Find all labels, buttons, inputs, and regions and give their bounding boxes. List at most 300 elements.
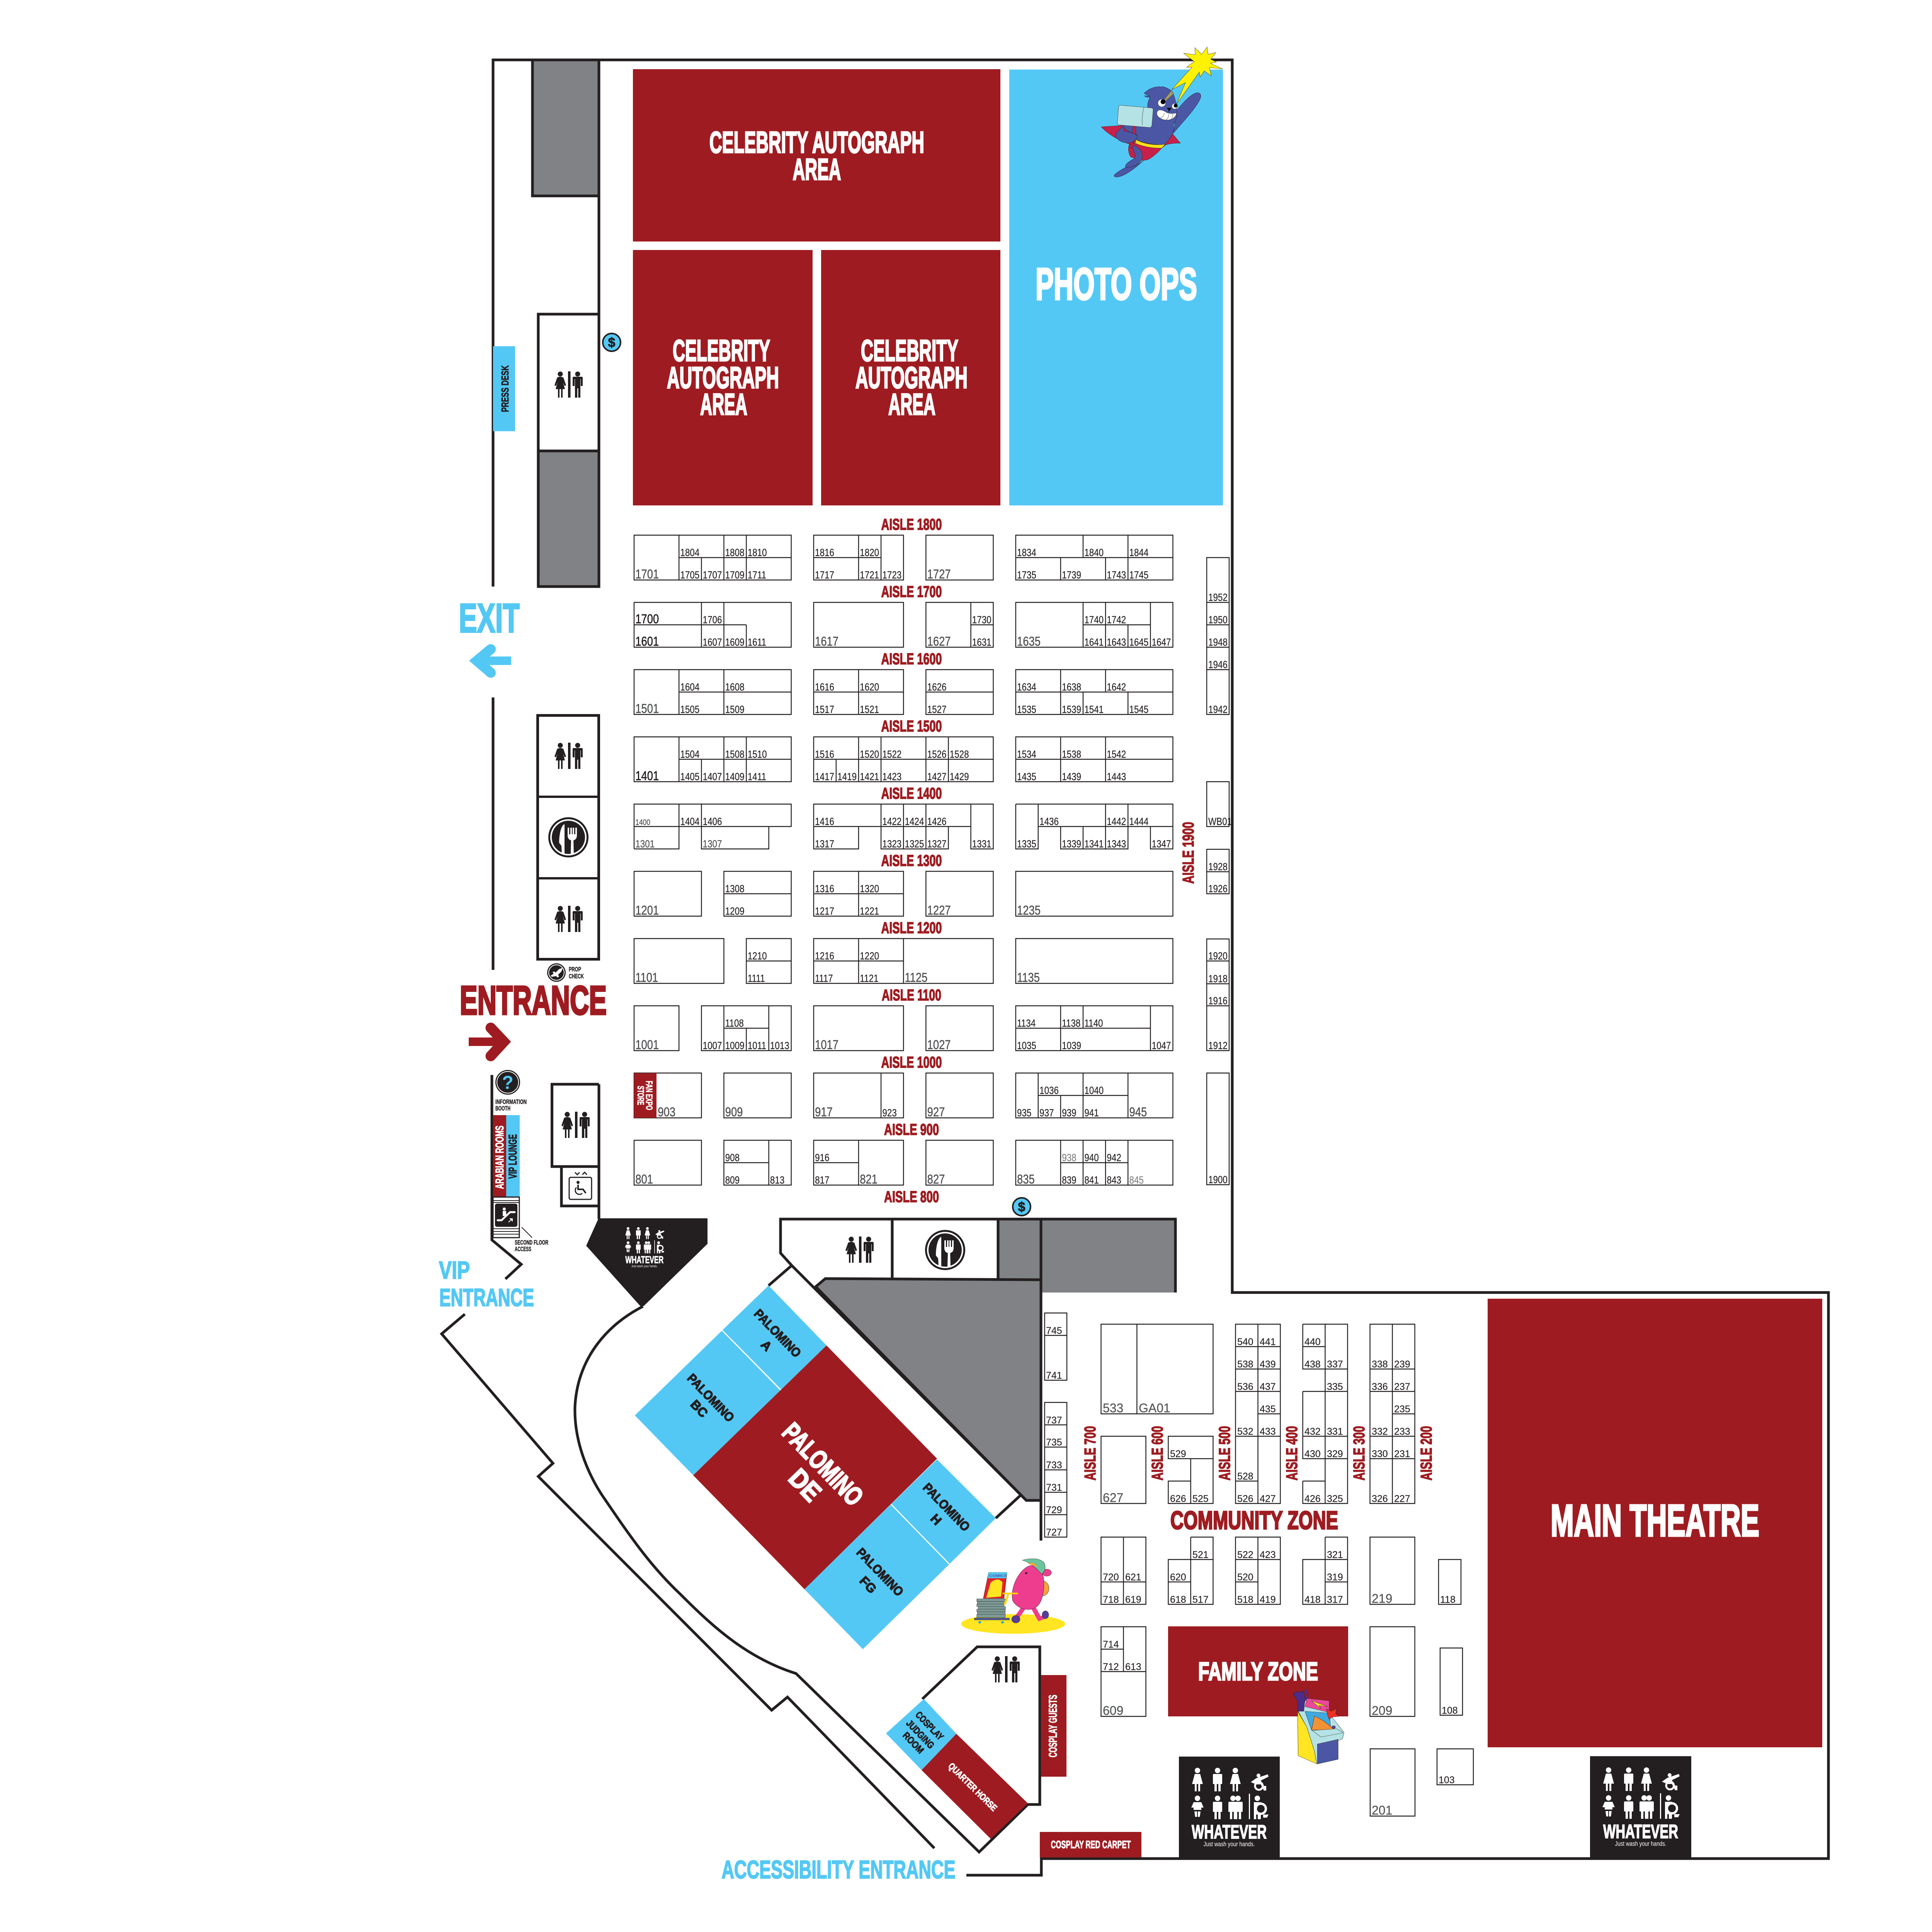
- booth row above aisle 1700: 1820: [860, 547, 879, 559]
- booth row above aisle 1500: 1545: [1129, 704, 1148, 716]
- booth row above aisle 1700: 1834: [1017, 547, 1036, 559]
- booth row above aisle 1200: 1320: [860, 883, 879, 895]
- panel: celebrity autograph area left: CELEBRITY: [673, 333, 770, 367]
- booth row above aisle 1700: 1723: [882, 570, 901, 581]
- community zone booths upper: 430: [1304, 1449, 1321, 1459]
- aisle labels community zone: AISLE 600: [1148, 1426, 1166, 1481]
- VIP lounge: VIP LOUNGE: [507, 1134, 519, 1179]
- aisle labels horizontal: AISLE 1500: [881, 717, 942, 735]
- community zone booths upper: 627: [1103, 1491, 1123, 1505]
- community zone booths upper: 438: [1304, 1359, 1321, 1370]
- booth row above aisle 1500: 1505: [680, 704, 699, 716]
- booth row above aisle 1100: 1121: [860, 973, 878, 985]
- whatever restroom right: [1590, 1756, 1691, 1859]
- prop check: PROP: [569, 966, 581, 973]
- booth row above aisle 1100: [634, 939, 1173, 985]
- community zone booths upper: 439: [1260, 1359, 1276, 1370]
- community zone booths upper: 227: [1394, 1493, 1410, 1504]
- booth row above aisle 1300: 1444: [1129, 816, 1149, 828]
- community zone booths upper: GA01: [1139, 1401, 1170, 1415]
- booth row above aisle 1600: 1647: [1152, 637, 1171, 648]
- booth row above aisle 1000: 1047: [1152, 1040, 1171, 1052]
- palomino hall diagonal walls: [769, 1265, 1021, 1518]
- whatever restroom wedge: Just wash your hands.: [631, 1264, 658, 1268]
- booth row above aisle 1300: 1343: [1107, 838, 1126, 850]
- quarter horse: QUARTER HORSE: [946, 1761, 999, 1813]
- booth row above aisle 900: 923: [882, 1107, 897, 1119]
- booth row above aisle 1400: 1439: [1062, 771, 1081, 783]
- panel: celebrity autograph area right: CELEBRITY: [861, 333, 958, 367]
- booth row above aisle 1700: 1707: [703, 570, 722, 581]
- information booth: BOOTH: [495, 1105, 510, 1112]
- cosplay red carpet: COSPLAY RED CARPET: [1051, 1838, 1131, 1850]
- left wall between exit and entrance: [492, 697, 495, 970]
- booth column 745 to 727: 741: [1046, 1370, 1062, 1381]
- booth row above aisle 1000: 1134: [1017, 1018, 1036, 1029]
- booth row above aisle 1700: 1840: [1084, 547, 1104, 559]
- quarter horse: [922, 1734, 1028, 1839]
- booth row above aisle 1400: 1421: [860, 771, 879, 783]
- booth row above aisle 1300: 1404: [680, 816, 700, 828]
- booth row above aisle 1000: 1027: [927, 1038, 951, 1052]
- booth row above aisle 1600: 1617: [815, 635, 838, 649]
- community zone booths lower: 201: [1372, 1803, 1392, 1817]
- booth row above aisle 1000: [634, 1006, 1173, 1052]
- community zone booths lower: 517: [1192, 1594, 1209, 1605]
- aisle labels community zone: AISLE 200: [1417, 1426, 1435, 1481]
- community zone booths upper: 440: [1304, 1337, 1321, 1347]
- aisle labels horizontal: AISLE 1000: [881, 1053, 942, 1071]
- fan expo store: STORE: [635, 1086, 646, 1105]
- booth row above aisle 1300: 1347: [1152, 838, 1171, 850]
- icon: ATM lower: [1013, 1198, 1031, 1216]
- community zone booths upper: 528: [1237, 1471, 1253, 1482]
- curved inner corridor wall: [575, 1306, 1040, 1852]
- whatever restroom centre: Just wash your hands.: [1203, 1840, 1255, 1848]
- community zone booths upper: 536: [1237, 1381, 1253, 1392]
- second floor access label: SECOND FLOOR: [515, 1239, 548, 1246]
- panel: palomino H: PALOMINO: [920, 1480, 973, 1534]
- VIP entrance label: [439, 1256, 534, 1311]
- booth row above aisle 1600: 1643: [1107, 637, 1126, 648]
- cosplay judging room: JUDGING: [904, 1718, 936, 1751]
- booth column aisle 1900: 1920: [1208, 951, 1228, 962]
- whatever restroom centre: [1179, 1757, 1280, 1859]
- booth column aisle 1900: 1928: [1208, 861, 1228, 873]
- booth row above aisle 1100: 1220: [860, 951, 879, 962]
- booth row above aisle 1400: 1528: [950, 749, 969, 760]
- community zone booths upper: 329: [1327, 1449, 1343, 1459]
- second floor access label: ACCESS: [515, 1245, 531, 1253]
- community zone booths lower: 219: [1372, 1592, 1392, 1605]
- panel: celebrity autograph area top: CELEBRITY AUTOGRAPH: [709, 125, 924, 159]
- panel: palomino FG: [804, 1505, 949, 1649]
- booth row above aisle 1400: 1405: [680, 771, 699, 783]
- booth row above aisle 1700: 1701: [635, 568, 659, 582]
- community zone booths upper: 533: [1103, 1401, 1123, 1415]
- booth row above aisle 1700: 1735: [1017, 570, 1036, 581]
- whatever restroom right: WHATEVER: [1603, 1821, 1678, 1842]
- booth row above aisle 1300: 1335: [1017, 838, 1036, 850]
- panel: celebrity autograph area left: AREA: [700, 387, 747, 421]
- booth row above aisle 900: 939: [1062, 1107, 1077, 1119]
- booth row above aisle 1600: 1742: [1107, 614, 1126, 626]
- community zone booths lower: 209: [1372, 1704, 1392, 1718]
- booth row above aisle 1700: 1727: [927, 568, 951, 582]
- booth row above aisle 1400: 1435: [1017, 771, 1036, 783]
- booth row above aisle 1000: 1009: [725, 1040, 745, 1052]
- booth row above aisle 1500: 1626: [927, 682, 946, 693]
- restroom lower: [992, 1656, 1020, 1682]
- panel: palomino DE: PALOMINO: [777, 1417, 869, 1512]
- booth row above aisle 1500: 1539: [1062, 704, 1081, 716]
- community zone booths upper: 338: [1372, 1359, 1388, 1370]
- booth row above aisle 1600: 1645: [1129, 637, 1148, 648]
- community zone booths lower: 621: [1125, 1572, 1141, 1583]
- community zone booths upper: 335: [1327, 1381, 1343, 1392]
- booth row above aisle 1000: 1007: [703, 1040, 722, 1052]
- community zone booths upper: 325: [1327, 1493, 1343, 1504]
- community zone booths upper: 336: [1372, 1381, 1388, 1392]
- booth row above aisle 1500: 1638: [1062, 682, 1081, 693]
- booth row above aisle 1200: 1217: [815, 906, 834, 917]
- booth row above aisle 900: 909: [725, 1105, 743, 1119]
- aisle labels horizontal: AISLE 800: [884, 1188, 939, 1206]
- booth column 745 to 727: 731: [1046, 1482, 1062, 1493]
- community zone booths lower: 103: [1439, 1775, 1455, 1786]
- panel: celebrity autograph area right: AUTOGRAPH: [855, 361, 968, 395]
- booth row above aisle 1500: 1620: [860, 682, 879, 693]
- VIP entrance wall: [492, 1075, 521, 1279]
- booth row above aisle 1600: 1607: [703, 637, 722, 648]
- booth row above aisle 1300: 1331: [972, 838, 992, 850]
- booth row above aisle 1400: [634, 737, 1173, 783]
- booth column aisle 1900: 1952: [1208, 592, 1228, 604]
- booth row above aisle 1300: 1301: [635, 838, 655, 850]
- booth row above aisle 900: 927: [927, 1105, 945, 1119]
- community zone booths upper: 526: [1237, 1493, 1253, 1504]
- booth row above aisle 1400: 1407: [703, 771, 722, 783]
- whatever restroom right: Just wash your hands.: [1615, 1840, 1666, 1847]
- aisle 1900 label: AISLE 1900: [1179, 822, 1197, 884]
- booth row above aisle 1700: 1808: [725, 547, 745, 559]
- press desk: [493, 346, 515, 431]
- booth row above aisle 800: 841: [1084, 1175, 1099, 1186]
- booth row above aisle 800: 916: [815, 1152, 829, 1164]
- booth row above aisle 1600: 1601: [635, 635, 659, 649]
- booth column aisle 1900: 1900: [1208, 1174, 1228, 1186]
- inner hall wall: [597, 60, 600, 587]
- booth row above aisle 1500: 1604: [680, 682, 700, 693]
- community zone booths lower: 518: [1237, 1594, 1253, 1605]
- aisle labels horizontal: AISLE 1600: [881, 650, 942, 668]
- booth row above aisle 1000: 1108: [725, 1018, 744, 1029]
- community zone booths lower: 619: [1125, 1594, 1141, 1605]
- booth column 745 to 727: 735: [1046, 1437, 1062, 1448]
- booth row above aisle 1400: 1427: [927, 771, 946, 783]
- booth row above aisle 900: 935: [1017, 1107, 1031, 1119]
- community zone booths upper: 525: [1192, 1493, 1209, 1504]
- booth row above aisle 1000: 1035: [1017, 1040, 1036, 1052]
- booth row above aisle 800: 938: [1062, 1152, 1077, 1164]
- booth row above aisle 800: 835: [1017, 1173, 1035, 1187]
- booth row above aisle 1300: [634, 804, 1173, 850]
- fan expo store: [634, 1073, 656, 1118]
- panel: palomino BC: [635, 1331, 781, 1475]
- booth row above aisle 1000: 1017: [815, 1038, 838, 1052]
- community zone heading: COMMUNITY ZONE: [1170, 1506, 1338, 1534]
- booth row above aisle 1000: 1039: [1062, 1040, 1081, 1052]
- icon: exit arrow: [477, 649, 511, 673]
- booth row above aisle 1100: 1125: [905, 971, 927, 985]
- community zone booths lower: 720: [1103, 1572, 1119, 1583]
- community zone booths lower: 609: [1103, 1704, 1123, 1718]
- booth row above aisle 900: 937: [1039, 1107, 1054, 1119]
- booth row above aisle 800: 940: [1084, 1152, 1099, 1164]
- community zone booths upper: 626: [1170, 1493, 1186, 1504]
- booth row above aisle 900: 917: [815, 1105, 833, 1119]
- booth row above aisle 1300: 1323: [882, 838, 901, 850]
- booth row above aisle 1700: [634, 535, 1173, 582]
- booth row above aisle 1700: 1844: [1129, 547, 1149, 559]
- booth row above aisle 1500: 1616: [815, 682, 834, 693]
- community zone booths upper: 433: [1260, 1426, 1276, 1437]
- community zone booths lower: 712: [1103, 1662, 1119, 1672]
- community zone booths lower: [1101, 1537, 1473, 1817]
- booth row above aisle 1600: [634, 602, 1173, 649]
- community zone booths lower: 714: [1103, 1639, 1119, 1650]
- booth row above aisle 1000: 1013: [770, 1040, 789, 1052]
- community zone booths lower: 620: [1170, 1572, 1186, 1583]
- grey block: upper left service area: [532, 60, 599, 196]
- booth row above aisle 1400: 1510: [748, 749, 767, 760]
- panel: celebrity autograph area right: AREA: [888, 387, 935, 421]
- panel: palomino FG: PALOMINO: [854, 1545, 906, 1599]
- community zone booths upper: 529: [1170, 1449, 1186, 1459]
- aisle labels community zone: [1081, 1426, 1435, 1481]
- booth row above aisle 1500: 1541: [1084, 704, 1104, 716]
- community zone booths upper: 432: [1304, 1426, 1321, 1437]
- booth row above aisle 1300: 1424: [905, 816, 924, 828]
- booth row above aisle 1700: 1711: [748, 570, 766, 581]
- booth column 745 to 727: 737: [1046, 1415, 1062, 1426]
- booth row above aisle 1500: 1509: [725, 704, 745, 716]
- panel: palomino A: A: [758, 1337, 775, 1354]
- booth row above aisle 1600: 1635: [1017, 635, 1041, 649]
- booth column 745 to 727: 727: [1046, 1527, 1062, 1538]
- panel: celebrity autograph area top: AREA: [793, 152, 841, 186]
- booth row above aisle 1200: 1201: [635, 904, 659, 918]
- booth row above aisle 1700: 1709: [725, 570, 745, 581]
- information booth: [495, 1070, 527, 1112]
- booth row above aisle 1300: 1416: [815, 816, 834, 828]
- community zone booths upper: 239: [1394, 1359, 1410, 1370]
- community zone booths lower: 613: [1125, 1662, 1141, 1672]
- arabian rooms: ARABIAN ROOMS: [493, 1126, 506, 1189]
- aisle labels horizontal: AISLE 1200: [881, 919, 942, 937]
- aisle labels horizontal: AISLE 900: [884, 1121, 939, 1138]
- booth row above aisle 800: 845: [1129, 1175, 1144, 1186]
- aisle labels community zone: AISLE 300: [1350, 1426, 1368, 1481]
- booth row above aisle 1300: 1317: [815, 838, 834, 850]
- information booth: ?: [502, 1073, 514, 1093]
- aisle labels community zone: AISLE 700: [1081, 1426, 1099, 1481]
- booth row above aisle 1000: 1140: [1084, 1018, 1103, 1029]
- booth row above aisle 1700: 1804: [680, 547, 700, 559]
- cosplay guests: COSPLAY GUESTS: [1047, 1695, 1060, 1757]
- panel: main theatre: MAIN THEATRE: [1551, 1495, 1759, 1546]
- booth row above aisle 1700: 1743: [1107, 570, 1126, 581]
- booth row above aisle 900: 1040: [1084, 1085, 1104, 1097]
- booth row above aisle 1400: 1419: [837, 771, 857, 783]
- panel: main theatre: [1488, 1299, 1822, 1747]
- community zone booths lower: 317: [1327, 1594, 1343, 1605]
- cosplay judging room: ROOM: [900, 1730, 926, 1756]
- booth row above aisle 1100: 1101: [635, 971, 658, 985]
- panel: palomino A: [723, 1286, 827, 1389]
- panel: palomino BC: PALOMINO: [684, 1371, 737, 1425]
- booth row above aisle 1000: 1138: [1062, 1018, 1080, 1029]
- restroom upper: [538, 314, 599, 451]
- community zone booths lower: 423: [1260, 1549, 1276, 1560]
- icon: ATM upper: $: [608, 335, 616, 350]
- booth row above aisle 1400: 1520: [860, 749, 879, 760]
- booth row above aisle 1500: 1501: [635, 702, 659, 716]
- panel: family zone: [1168, 1626, 1348, 1716]
- booth row above aisle 1200: 1227: [927, 904, 951, 918]
- VIP entrance label: VIP: [439, 1256, 470, 1284]
- booth row above aisle 1200: 1221: [860, 906, 879, 917]
- booth row above aisle 1700: 1816: [815, 547, 834, 559]
- community zone booths lower: 319: [1327, 1572, 1343, 1583]
- community zone booths upper: 427: [1260, 1493, 1276, 1504]
- booth row above aisle 1100: 1111: [748, 973, 765, 985]
- booth row above aisle 1500: 1527: [927, 704, 946, 716]
- booth column aisle 1900: 1926: [1208, 883, 1228, 895]
- whatever restroom wedge: WHATEVER: [625, 1255, 663, 1265]
- booth column aisle 1900: 1946: [1208, 659, 1228, 671]
- booth row above aisle 1300: 1442: [1107, 816, 1126, 828]
- icon: pink mascot pulling comics cart: [961, 1559, 1065, 1634]
- panel: palomino H: [891, 1459, 996, 1564]
- community zone booths upper: 441: [1260, 1337, 1276, 1347]
- booth row above aisle 1200: 1235: [1017, 904, 1041, 918]
- booth row above aisle 1600: 1609: [725, 637, 745, 648]
- booth row above aisle 1600: 1641: [1084, 637, 1104, 648]
- booth row above aisle 1700: 1717: [815, 570, 834, 581]
- community zone booths lower: 521: [1192, 1549, 1209, 1560]
- booth row above aisle 800: 839: [1062, 1175, 1077, 1186]
- booth column aisle 1900: 1918: [1208, 973, 1228, 985]
- community zone booths lower: 321: [1327, 1549, 1343, 1560]
- aisle labels horizontal: [881, 515, 942, 1206]
- booth column aisle 1900: 1912: [1208, 1040, 1228, 1052]
- booth row above aisle 1300: 1341: [1084, 838, 1104, 850]
- arabian rooms: [493, 1115, 506, 1197]
- accessibility entrance label: ACCESSIBILITY ENTRANCE: [722, 1855, 955, 1884]
- booth column aisle 1900: 1942: [1208, 704, 1228, 716]
- booth column 745 to 727: 745: [1046, 1325, 1062, 1336]
- community zone booths upper: 538: [1237, 1359, 1253, 1370]
- booth row above aisle 1300: 1422: [882, 816, 901, 828]
- community zone booths upper: 231: [1394, 1449, 1410, 1459]
- booth row above aisle 1300: 1406: [703, 816, 722, 828]
- VIP entrance label: ENTRANCE: [439, 1284, 534, 1311]
- booth row above aisle 800: 843: [1107, 1175, 1121, 1186]
- booth row above aisle 1200: 1316: [815, 883, 834, 895]
- whatever restroom wedge: [586, 1218, 707, 1306]
- prop check: CHECK: [569, 973, 584, 980]
- panel: palomino DE: DE: [783, 1463, 827, 1507]
- press desk: PRESS DESK: [499, 365, 511, 412]
- community zone booths lower: 522: [1237, 1549, 1253, 1560]
- booth row above aisle 1200: 1209: [725, 906, 745, 917]
- aisle labels horizontal: AISLE 1300: [881, 852, 942, 869]
- booth row above aisle 1400: 1504: [680, 749, 700, 760]
- booth row above aisle 1100: 1135: [1017, 971, 1040, 985]
- community zone booths upper: 233: [1394, 1426, 1410, 1437]
- panel: celebrity autograph area top: [633, 69, 1000, 242]
- booth column 745 to 727: 733: [1046, 1460, 1062, 1471]
- aisle labels horizontal: AISLE 1400: [881, 784, 942, 802]
- icon: superhero mascot with hammer and laser eyes: [1101, 47, 1223, 177]
- booth row above aisle 1100: 1216: [815, 951, 834, 962]
- booth row above aisle 800: [634, 1140, 1173, 1187]
- upper service block with restroom and food: [781, 1219, 1175, 1541]
- booth row above aisle 1300: 1426: [927, 816, 946, 828]
- booth row above aisle 1400: 1542: [1107, 749, 1126, 760]
- booth row above aisle 1500: 1517: [815, 704, 834, 716]
- booth row above aisle 1300: 1327: [927, 838, 946, 850]
- community zone booths upper: 426: [1304, 1493, 1321, 1504]
- aisle labels community zone: AISLE 500: [1216, 1426, 1233, 1481]
- booth row above aisle 1400: 1538: [1062, 749, 1081, 760]
- booth row above aisle 1500: 1642: [1107, 682, 1126, 693]
- escalator to second floor: [493, 1197, 519, 1238]
- booth row above aisle 1600: 1627: [927, 635, 951, 649]
- cosplay judging room: COSPLAY: [913, 1709, 946, 1743]
- community zone booths upper: 237: [1394, 1381, 1410, 1392]
- community zone booths upper: 435: [1260, 1404, 1276, 1415]
- grey block: beside upper restroom: [538, 451, 599, 587]
- community zone booths lower: 118: [1440, 1594, 1456, 1605]
- booth row above aisle 800: 821: [860, 1173, 878, 1187]
- booth row above aisle 800: 817: [815, 1175, 829, 1186]
- booth row above aisle 1300: 1307: [703, 838, 722, 850]
- VIP lounge: [506, 1115, 520, 1197]
- restroom near entrance: [552, 1084, 599, 1219]
- booth row above aisle 1400: 1423: [882, 771, 901, 783]
- cosplay red carpet: [1040, 1832, 1141, 1857]
- aisle labels horizontal: AISLE 1800: [881, 515, 942, 533]
- booth row above aisle 1200: [634, 871, 1173, 918]
- outer building wall: [493, 60, 1828, 1875]
- community zone booths lower: 419: [1260, 1594, 1276, 1605]
- booth row above aisle 1400: 1522: [882, 749, 901, 760]
- booth row above aisle 1400: 1401: [635, 769, 659, 783]
- booth row above aisle 800: 908: [725, 1152, 740, 1164]
- community zone booths upper: 331: [1327, 1426, 1343, 1437]
- booth row above aisle 900: 941: [1084, 1107, 1099, 1119]
- booth column aisle 1900: 1948: [1208, 637, 1228, 648]
- whatever restroom centre: WHATEVER: [1192, 1821, 1267, 1843]
- aisle labels horizontal: AISLE 1100: [882, 986, 941, 1004]
- booth row above aisle 1000: 1001: [635, 1038, 659, 1052]
- booth row above aisle 1100: 1117: [815, 973, 833, 985]
- booth column aisle 1900: 1950: [1208, 614, 1228, 626]
- panel: palomino FG: FG: [857, 1573, 879, 1596]
- booth row above aisle 800: 801: [635, 1173, 653, 1187]
